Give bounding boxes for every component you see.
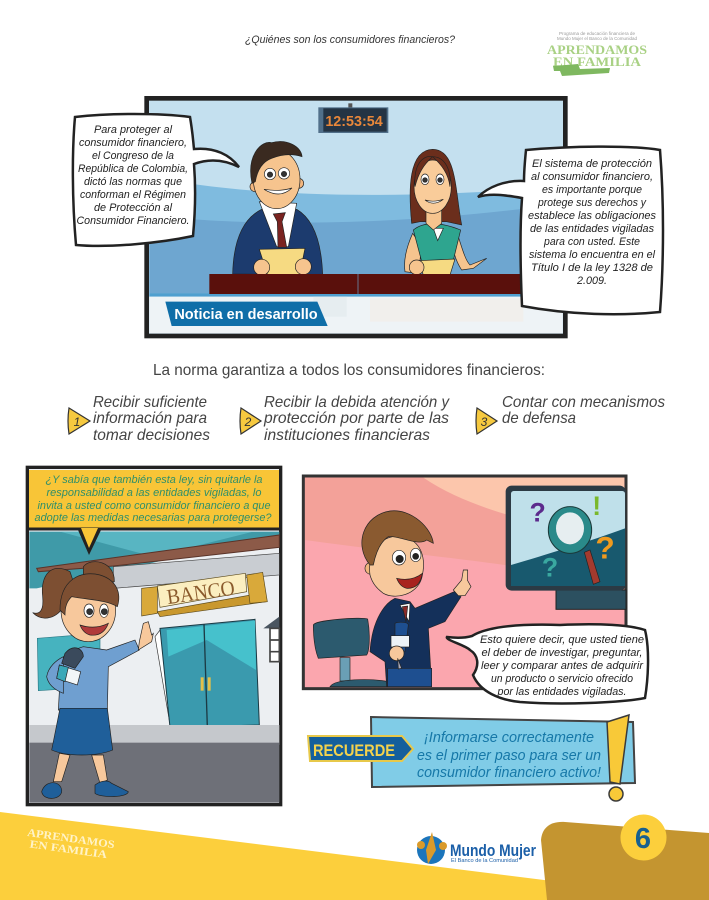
recuerde callout: es el primer paso para ser un — [417, 748, 601, 764]
speech bubble: bottom right: Esto quiere decir, que usted tiene — [480, 634, 644, 646]
callout: yellow question: invita a usted como consumidor financiero a que — [38, 500, 270, 512]
speech bubble: right: sistema lo encuentra en el — [529, 249, 656, 261]
lantern — [263, 617, 279, 662]
recuerde tag: RECUERDE — [313, 741, 395, 760]
panel: bank reporter — [27, 467, 281, 805]
monitor: ? — [542, 553, 558, 583]
news desk — [209, 274, 523, 294]
speech bubble: left: Para proteger al — [94, 124, 173, 136]
monitor: ! — [592, 491, 601, 521]
logo: Mundo Mujer: Mundo Mujer — [450, 841, 536, 860]
speech bubble: bottom right: leer y comparar antes de adquirir — [481, 660, 644, 672]
logo: Aprendamos en Familia: APRENDAMOS — [547, 42, 647, 57]
speech bubble: left: Consumidor Financiero. — [76, 215, 190, 227]
speech bubble: right: protege sus derechos y — [537, 197, 647, 209]
icon: number 1 — [68, 408, 90, 434]
footer brown shape — [541, 822, 709, 900]
logo: Mundo Mujer — [417, 832, 536, 864]
panel: news studio — [147, 98, 565, 336]
reporter girl — [33, 562, 153, 798]
icon: number 2 — [240, 408, 261, 434]
recuerde callout — [308, 715, 635, 801]
item 1 — [68, 394, 210, 444]
speech bubble: left — [73, 114, 239, 246]
logo: Aprendamos en Familia: Programa de educación financiera de — [559, 31, 635, 36]
speech bubble: bottom right — [447, 624, 648, 703]
speech bubble: left: de Protección al — [94, 202, 173, 214]
icon: exclamation mark — [607, 715, 629, 801]
item 1: información para — [93, 410, 207, 427]
item 3 — [476, 394, 665, 434]
logo: Aprendamos en Familia — [547, 31, 647, 76]
recuerde callout: ¡Informarse correctamente — [424, 730, 594, 746]
icon: number 2: 2 — [244, 415, 252, 429]
monitor: ? — [595, 529, 615, 565]
callout: yellow question — [29, 470, 279, 555]
item 1: Recibir suficiente — [93, 394, 207, 411]
presenter man — [233, 141, 323, 277]
logo: Aprendamos en Familia: Mundo Mujer el Banco de la Comunidad — [557, 36, 637, 41]
digital clock — [318, 103, 388, 133]
callout: yellow question: ¿Y sabía que también esta ley, sin quitarle la — [46, 474, 262, 486]
panel: reporter with monitor — [303, 476, 648, 703]
bank sign: BANCO — [165, 576, 236, 609]
item 2 — [240, 394, 450, 444]
heading: la norma garantiza: La norma garantiza a todos los consumidores financieros: — [153, 362, 545, 379]
item 1: tomar decisiones — [93, 427, 210, 444]
news banner: Noticia en desarrollo — [174, 307, 318, 323]
recuerde callout: consumidor financiero activo! — [417, 765, 601, 781]
speech bubble: right: Título I de la ley 1328 de — [531, 262, 653, 274]
speech bubble: right: El sistema de protección — [532, 158, 652, 170]
digital clock: 12:53:54 — [325, 114, 383, 130]
speech bubble: bottom right: el deber de investigar, preguntar, — [482, 647, 642, 659]
speech bubble: right: al consumidor financiero, — [531, 171, 653, 183]
speech bubble: right: de las entidades vigiladas — [530, 223, 654, 235]
page number — [620, 814, 666, 860]
speech bubble: right: establece las obligaciones — [528, 210, 656, 222]
monitor — [506, 486, 626, 609]
callout: yellow question: responsabilidad a las entidades vigiladas, lo — [46, 487, 262, 499]
reporter man — [362, 511, 471, 687]
page number: 6 — [635, 823, 651, 855]
speech bubble: right: para con usted. Este — [543, 236, 640, 248]
speech bubble: left: dictó las normas que — [84, 176, 182, 188]
speech bubble: left: el Congreso de la — [92, 150, 174, 162]
recuerde tag — [308, 736, 413, 761]
footer brand text: EN FAMILIA — [29, 838, 108, 861]
speech bubble: bottom right: por las entidades vigiladas. — [497, 686, 626, 698]
monitor: ? — [530, 498, 546, 528]
callout: yellow question: adopte las medidas necesarias para protegerse? — [34, 512, 272, 524]
footer brand text: APRENDAMOS — [26, 827, 115, 851]
speech bubble: left: consumidor financiero, — [79, 137, 187, 149]
news banner — [165, 302, 328, 326]
item 2: instituciones financieras — [264, 427, 430, 444]
bank sign — [142, 572, 267, 617]
icon: number 3 — [476, 408, 497, 434]
footer brand text — [25, 827, 115, 862]
presenter woman — [405, 149, 487, 275]
speech bubble: bottom right: un producto o servicio ofrecido — [491, 673, 633, 685]
speech bubble: right — [478, 147, 663, 314]
logo: Aprendamos en Familia: EN FAMILIA — [553, 54, 642, 69]
item 2: protección por parte de las — [263, 410, 449, 427]
window left — [37, 633, 100, 691]
speech bubble: left: conforman el Régimen — [80, 189, 186, 201]
header title: ¿Quiénes son los consumidores financieros? — [245, 34, 456, 46]
icon: number 1: 1 — [74, 415, 80, 429]
sidewalk and road — [29, 725, 279, 803]
footer yellow band — [0, 812, 560, 900]
logo: Mundo Mujer: El Banco de la Comunidad — [451, 858, 518, 864]
chair — [313, 618, 388, 687]
bank door — [155, 619, 259, 728]
item 3: Contar con mecanismos — [502, 394, 665, 411]
speech bubble: right: es importante porque — [542, 184, 642, 196]
speech bubble: right: 2.009. — [576, 275, 607, 287]
icon: number 3: 3 — [481, 415, 488, 429]
item 2: Recibir la debida atención y — [264, 394, 450, 411]
speech bubble: left: República de Colombia, — [78, 163, 188, 175]
item 3: de defensa — [502, 410, 576, 427]
